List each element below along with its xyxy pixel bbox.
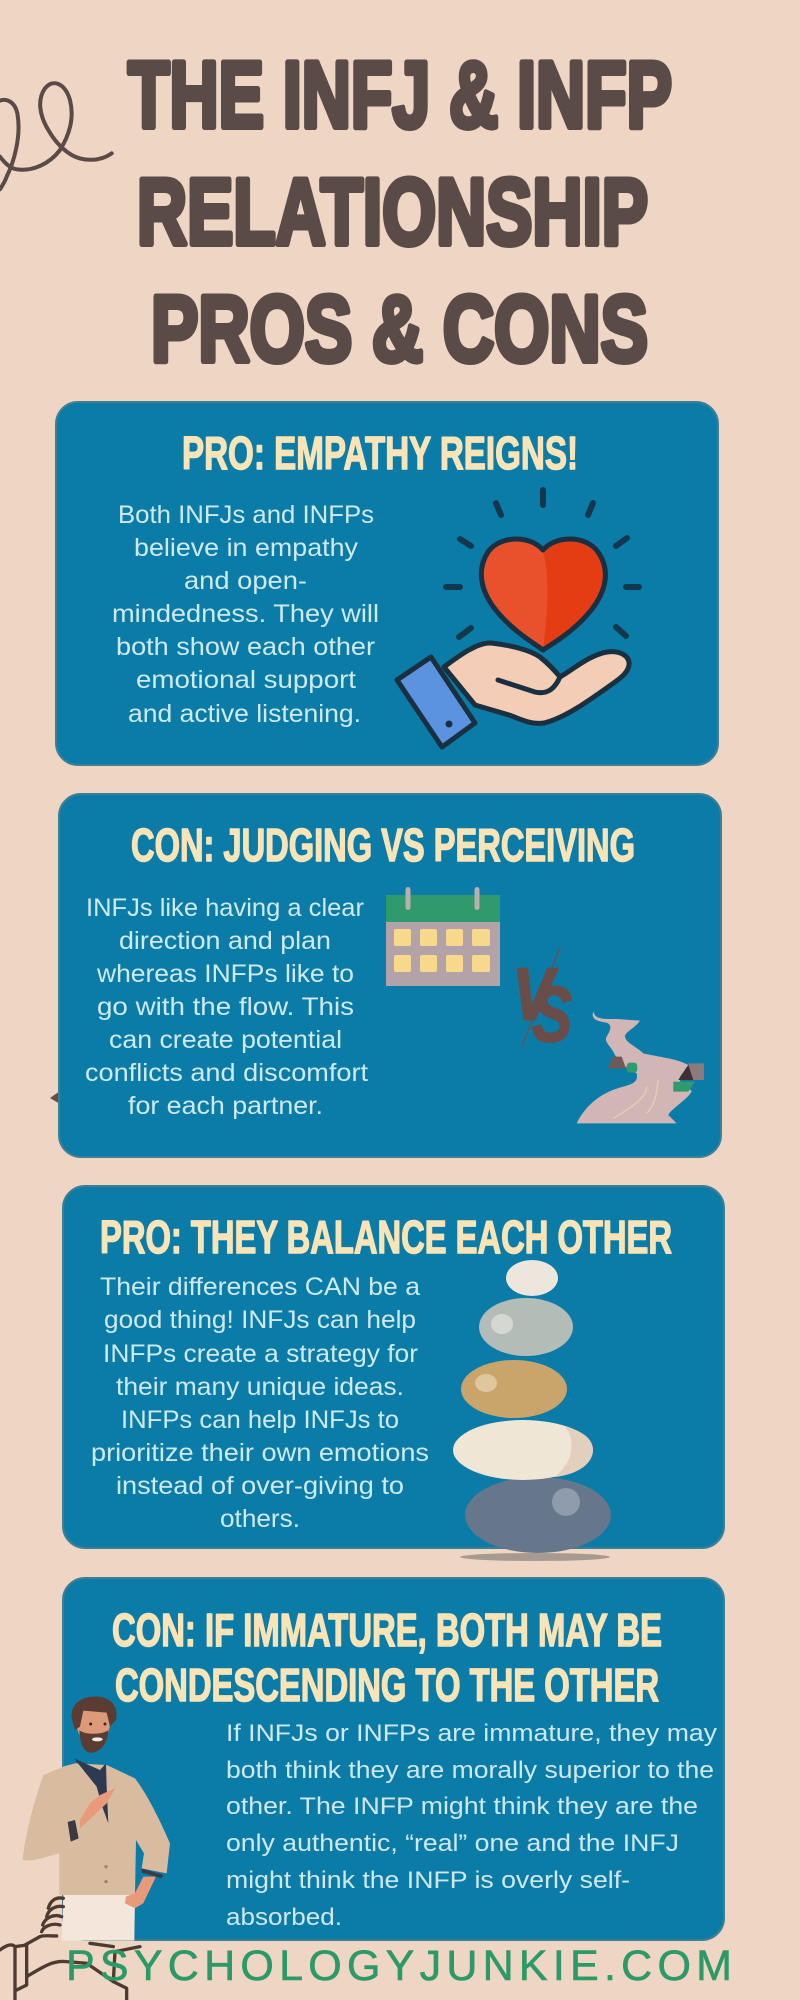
title — [128, 42, 672, 381]
text block: condescending: only authentic, “real” one and the INFJ — [226, 1830, 679, 1857]
text block: empathy: mindedness. They will — [112, 600, 379, 628]
text block: balance: their many unique ideas. — [116, 1373, 404, 1401]
text block: empathy: and active listening. — [128, 700, 361, 728]
icon: vs: S — [532, 970, 572, 1058]
text block: empathy: both show each other — [116, 633, 375, 661]
panel: con condescending — [63, 1578, 724, 1940]
small brown mark — [50, 1091, 60, 1104]
text block: balance: Their differences CAN be a — [100, 1273, 420, 1301]
panel: pro empathy — [56, 402, 718, 765]
doodle: rope and hand — [0, 1898, 140, 2000]
text block: empathy: believe in empathy — [134, 534, 359, 562]
text block: judging: INFJs like having a clear — [86, 894, 364, 922]
text block: judging: can create potential — [109, 1026, 342, 1054]
text block: empathy: emotional support — [136, 666, 356, 694]
text block: judging: for each partner. — [128, 1092, 323, 1120]
text block: judging: go with the flow. This — [97, 993, 354, 1021]
heading: condescending — [112, 1604, 662, 1711]
text block: balance: INFPs can help INFJs to — [121, 1406, 399, 1434]
heading: empathy reigns: PRO: EMPATHY REIGNS! — [182, 427, 578, 479]
text block: condescending: other. The INFP might think they are the — [226, 1793, 698, 1820]
decorative squiggle — [0, 83, 112, 189]
text block: condescending: both think they are morally superior to the — [226, 1757, 714, 1784]
panel: pro balance — [63, 1186, 724, 1561]
text block: balance: good thing! INFJs can help — [104, 1306, 416, 1334]
text block: condescending: absorbed. — [226, 1904, 342, 1931]
icon: vs: V — [513, 955, 558, 1035]
text block: condescending: If INFJs or INFPs are immature, they may — [226, 1720, 717, 1747]
illustration: man gesturing — [23, 1696, 170, 1941]
text block: condescending: might think the INFP is overly self- — [226, 1867, 630, 1894]
text block: balance: others. — [220, 1505, 300, 1533]
text block: empathy: and open- — [184, 567, 307, 595]
text block: judging: whereas INFPs like to — [96, 960, 354, 988]
text block: judging — [85, 894, 368, 1120]
text block: balance: instead of over-giving to — [116, 1472, 404, 1500]
icon: stacked stones — [453, 1260, 611, 1561]
footer: website: PSYCHOLOGYJUNKIE.COM — [66, 1942, 732, 1990]
text block: balance: INFPs create a strategy for — [103, 1340, 418, 1368]
text block: judging: direction and plan — [119, 927, 331, 955]
text block: condescending — [226, 1720, 717, 1931]
icon: vs — [513, 947, 572, 1058]
text block: judging: conflicts and discomfort — [85, 1059, 368, 1087]
text block: empathy — [112, 501, 379, 728]
icon: calendar — [386, 887, 500, 986]
icon: winding road — [577, 1012, 704, 1123]
text block: balance — [91, 1273, 429, 1533]
panel: con judging vs perceiving — [59, 794, 721, 1157]
icon: heart in hand — [397, 490, 639, 747]
title: PROS & CONS — [151, 276, 648, 381]
text block: empathy: Both INFJs and INFPs — [118, 501, 374, 529]
text block: balance: prioritize their own emotions — [91, 1439, 429, 1467]
